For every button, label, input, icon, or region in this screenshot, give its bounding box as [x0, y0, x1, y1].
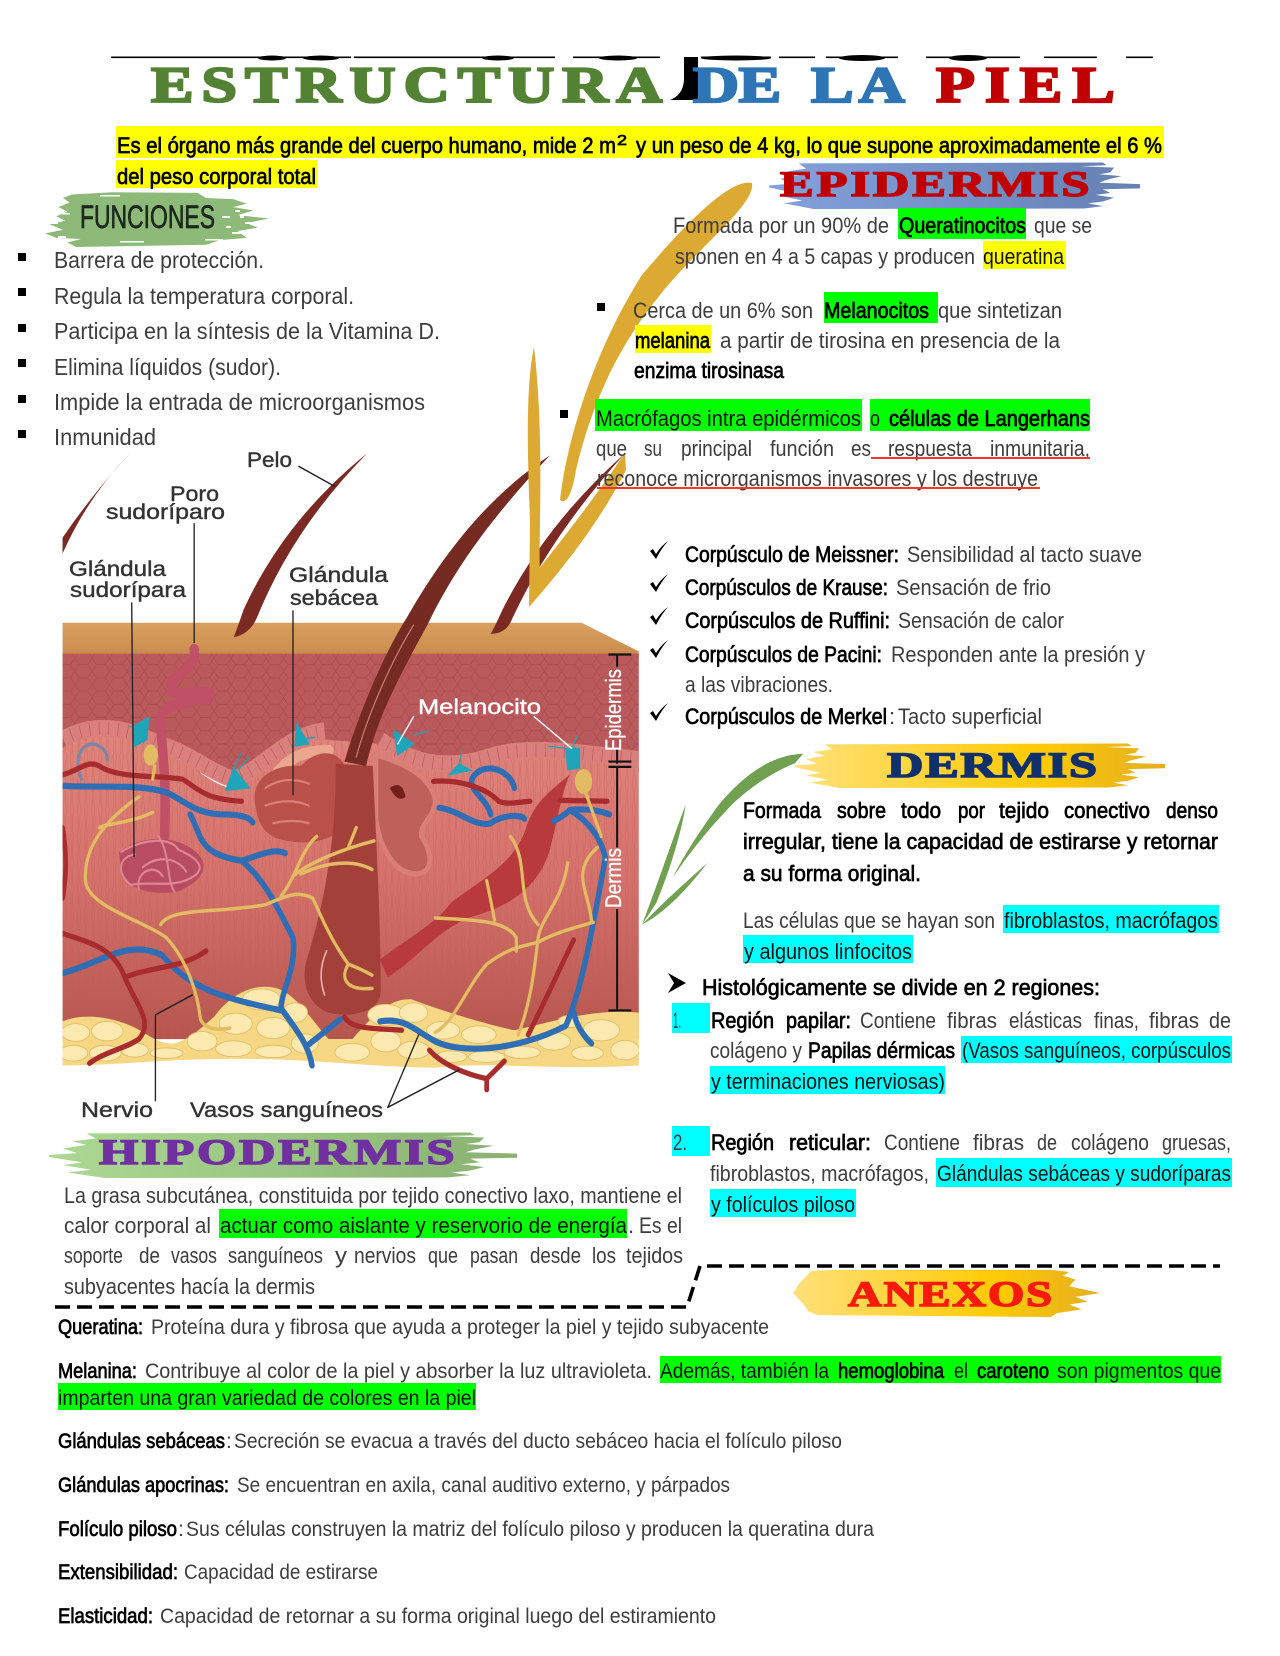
hipodermis text: actuar como aislante y reservorio de energía	[220, 1213, 628, 1238]
epidermis text: melanocitos: Cerca de un 6% son	[633, 298, 813, 323]
hipodermis heading: HIPODERMIS	[99, 1133, 455, 1172]
dermis description: sobre	[837, 798, 886, 823]
dermis heading: DERMIS	[887, 746, 1097, 785]
hipodermis text: los	[592, 1243, 616, 1268]
epidermis text: macrofagos: respuesta	[888, 436, 973, 461]
label: poro sudoriparo: sudoríparo	[106, 501, 225, 524]
hipodermis text: y	[335, 1243, 347, 1268]
anexo: melanina: hemoglobina	[838, 1360, 944, 1383]
region papilar: finas,	[1094, 1008, 1139, 1033]
pacini	[650, 640, 1145, 697]
anexo: melanina: imparten una gran variedad de colores en la piel	[58, 1387, 476, 1410]
nerve endings	[144, 744, 592, 794]
hipodermis heading	[49, 1132, 517, 1178]
region reticular: reticular:	[789, 1130, 871, 1155]
blue blood vessels	[63, 744, 609, 1066]
epidermis text: macrofagos: su	[644, 436, 662, 461]
dermis description	[743, 798, 1218, 886]
anexo: glandulas apocrinas	[58, 1474, 730, 1497]
anexo: elasticidad: Capacidad de retornar a su forma original luego del estiramiento	[160, 1605, 716, 1628]
epidermis text: macrofagos: células de Langerhans	[889, 406, 1090, 431]
anexo: melanina: Melanina:	[58, 1360, 137, 1383]
epidermis text: macrofagos	[560, 399, 1090, 491]
dermis cells: y algunos linfocitos	[744, 939, 912, 964]
dermis cells: Las células que se hayan son	[743, 908, 995, 933]
leader lines	[132, 466, 459, 1107]
hipodermis text: nervios	[354, 1243, 416, 1268]
label: glandula sudoripara: sudorípara	[70, 579, 186, 602]
title word LA: LA	[811, 58, 905, 113]
funciones heading	[45, 192, 269, 247]
epidermis text: queratinocitos: sponen en 4 a 5 capas y producen	[675, 244, 975, 269]
hipodermis text: Es el	[639, 1213, 682, 1238]
hipodermis text: La grasa subcutánea, constituida por tejido conectivo laxo, mantiene el	[64, 1183, 682, 1208]
label: nervio: Nervio	[81, 1099, 153, 1122]
region reticular: de	[1037, 1130, 1057, 1155]
anexo: melanina: Además, también la	[660, 1360, 829, 1383]
fat layer	[63, 987, 639, 1068]
label: epidermis: Epidermis	[601, 669, 626, 751]
epidermis text: melanocitos: enzima tirosinasa	[634, 358, 785, 383]
hipodermis text: tejidos	[626, 1243, 683, 1268]
ruffini	[650, 607, 1064, 633]
hipodermis text: subyacentes hacía la dermis	[64, 1274, 315, 1299]
region reticular: 2.	[673, 1130, 687, 1155]
region papilar: de	[1209, 1008, 1231, 1033]
region reticular: fibroblastos, macrófagos,	[710, 1161, 929, 1186]
epidermis text: melanocitos: que sintetizan	[938, 298, 1062, 323]
region reticular: gruesas,	[1162, 1130, 1231, 1155]
anexo: foliculo piloso: Folículo piloso	[58, 1518, 177, 1541]
epidermis text: macrofagos: que	[596, 436, 627, 461]
anexo: queratina: Proteína dura y fibrosa que ayuda a proteger la piel y tejido subyacente	[151, 1316, 769, 1339]
title word DE: DE	[693, 58, 781, 113]
hipodermis text: .	[628, 1213, 634, 1238]
region reticular: y folículos piloso	[711, 1192, 855, 1217]
scale bars	[608, 655, 631, 1010]
region papilar: Papilas dérmicas	[808, 1038, 955, 1063]
region papilar: papilar:	[786, 1008, 851, 1033]
merkel: Corpúsculos de Merkel	[685, 704, 887, 729]
ruffini: Sensación de calor	[898, 608, 1064, 633]
region papilar	[672, 1003, 1232, 1094]
intro highlighted text: y un peso de 4 kg, lo que supone aproximadamente el 6 %	[636, 133, 1162, 158]
dermis description: todo	[901, 798, 941, 823]
fat cells	[59, 989, 639, 1062]
region reticular: Región	[711, 1130, 774, 1155]
dermis cells	[743, 905, 1219, 964]
dermis description: Formada	[743, 798, 822, 823]
title	[111, 55, 1153, 113]
dermis cells: fibroblastos, macrófagos	[1004, 908, 1218, 933]
merkel: :	[889, 704, 895, 729]
dermis description: conectivo	[1064, 798, 1150, 823]
epidermis text: macrofagos: función	[770, 436, 834, 461]
region papilar: fibras	[1149, 1008, 1199, 1033]
melanocito leaders	[398, 717, 572, 748]
label: poro sudoriparo: Poro	[170, 483, 219, 506]
region papilar: Contiene	[860, 1008, 936, 1033]
hipodermis text: de	[139, 1243, 160, 1268]
anexo: foliculo piloso: Sus células construyen la matriz del folículo piloso y producen la queratina dura	[186, 1518, 874, 1541]
skin cross-section illustration	[59, 449, 639, 1122]
hipodermis text: que	[428, 1243, 458, 1268]
hipodermis text: soporte	[64, 1243, 123, 1268]
epidermis text: queratinocitos: que se	[1034, 213, 1092, 238]
intro highlighted text: 2	[617, 132, 627, 149]
epidermis text: melanocitos: Melanocitos	[824, 298, 929, 323]
sweat duct	[160, 649, 210, 836]
label: glandula sudoripara	[69, 558, 186, 602]
melanocytes	[129, 718, 580, 790]
meissner	[650, 541, 1142, 567]
anexo: elasticidad: Elasticidad:	[58, 1605, 153, 1628]
epidermis heading: EPIDERMIS	[780, 165, 1089, 204]
pacini: Corpúsculos de Pacini:	[685, 642, 882, 667]
pacini: Responden ante la presión y	[891, 642, 1145, 667]
sebaceous gland right	[376, 755, 435, 874]
label: glandula sebacea: sebácea	[290, 587, 378, 610]
krause: Corpúsculos de Krause:	[685, 575, 888, 600]
intro highlighted text: Es el órgano más grande del cuerpo humano, mide 2 m	[117, 133, 616, 158]
hipodermis text: calor corporal al	[64, 1213, 211, 1238]
intro highlighted text: del peso corporal total	[117, 164, 316, 189]
pacini: a las vibraciones.	[685, 672, 833, 697]
dermis description: irregular, tiene la capacidad de estirarse y retornar	[743, 829, 1218, 854]
skin surface	[63, 623, 639, 658]
anexo: melanina: el	[954, 1360, 968, 1383]
anexo: extensibilidad	[58, 1561, 378, 1584]
epidermis text: melanocitos	[597, 292, 1062, 383]
anexo: glandulas sebaceas: Glándulas sebáceas	[58, 1430, 225, 1453]
dermis description: tejido	[999, 798, 1049, 823]
krause	[650, 574, 1051, 600]
region reticular: Glándulas sebáceas y sudoríparas	[937, 1161, 1231, 1186]
anexo: queratina: Queratina:	[58, 1316, 143, 1339]
region reticular: fibras	[973, 1130, 1024, 1155]
label: dermis: Dermis	[601, 848, 626, 908]
arrector muscle	[380, 775, 570, 977]
yellow nerves	[85, 766, 601, 1035]
dermis heading	[795, 743, 1165, 788]
anexo: foliculo piloso: :	[178, 1518, 184, 1541]
arrow: gold brush from epidermis heading	[528, 183, 752, 607]
anexo: melanina: Contribuye al color de la piel y absorber la luz ultravioleta.	[145, 1360, 652, 1383]
epidermis text: macrofagos: reconoce microrganismos invasores y los destruye	[597, 466, 1038, 491]
title rule with cropped ink	[111, 55, 1153, 100]
hipodermis text	[64, 1183, 683, 1299]
region reticular: colágeno	[1071, 1130, 1149, 1155]
histological regions heading: Histológicamente se divide en 2 regiones:	[702, 975, 1100, 1000]
epidermis text: queratinocitos: queratina	[983, 244, 1065, 269]
epidermis layer	[63, 654, 639, 773]
epidermis text: macrofagos: Macrófagos intra epidérmicos	[596, 406, 861, 431]
funciones list	[18, 247, 440, 450]
epidermis text: queratinocitos	[673, 208, 1092, 269]
item 4: Elimina líquidos (sudor).	[54, 354, 281, 380]
hairs above skin	[63, 453, 625, 637]
meissner: Sensibilidad al tacto suave	[907, 542, 1142, 567]
hipodermis text: vasos	[171, 1243, 217, 1268]
epidermis text: macrofagos: principal	[681, 436, 752, 461]
hipodermis text: desde	[530, 1243, 581, 1268]
region papilar: (Vasos sanguíneos, corpúsculos	[962, 1038, 1231, 1063]
sweat gland coil	[119, 839, 204, 893]
ruffini: Corpúsculos de Ruffini:	[685, 608, 890, 633]
anexo: glandulas sebaceas: Secreción se evacua a través del ducto sebáceo hacia el folículo piloso	[234, 1430, 842, 1453]
intro highlighted text	[116, 126, 1164, 189]
meissner: Corpúsculo de Meissner:	[685, 542, 899, 567]
title word ESTRUCTURA: ESTRUCTURA	[151, 58, 663, 113]
anexos heading: ANEXOS	[848, 1275, 1052, 1315]
label: vasos sanguineos: Vasos sanguíneos	[190, 1099, 383, 1122]
region papilar: fibras	[947, 1008, 997, 1033]
epidermis text: queratinocitos: Formada por un 90% de	[673, 213, 889, 238]
hair follicle	[305, 764, 381, 1015]
item 2: Regula la temperatura corporal.	[54, 283, 354, 309]
region papilar: y terminaciones nerviosas)	[711, 1069, 945, 1094]
region reticular	[672, 1126, 1232, 1217]
funciones heading: FUNCIONES	[80, 199, 215, 235]
anexo: melanina: caroteno	[977, 1360, 1049, 1383]
item 1: Barrera de protección.	[54, 247, 264, 273]
epidermis text: macrofagos: o	[870, 406, 880, 431]
label: glandula sebacea: Glándula	[289, 564, 388, 587]
sebaceous gland left	[255, 753, 352, 842]
central hair	[344, 455, 550, 766]
label: poro sudoriparo	[106, 483, 225, 524]
epidermis text: melanocitos: a partir de tirosina en presencia de la	[720, 328, 1061, 353]
anexo: melanina	[58, 1356, 1221, 1410]
region papilar: elásticas	[1009, 1008, 1082, 1033]
hipodermis text: pasan	[470, 1243, 518, 1268]
label: glandula sebacea	[289, 564, 388, 610]
anexo: glandulas apocrinas: Se encuentran en axila, canal auditivo externo, y párpados	[237, 1474, 730, 1497]
red blood vessels	[63, 764, 607, 1090]
label: pelo: Pelo	[247, 449, 292, 472]
epidermis text: macrofagos: es	[851, 436, 871, 461]
dermis description: a su forma original.	[743, 861, 921, 886]
epidermis text: queratinocitos: Queratinocitos	[899, 213, 1026, 238]
label: glandula sudoripara: Glándula	[69, 558, 166, 581]
region reticular: Contiene	[884, 1130, 960, 1155]
label: melanocito: Melanocito	[418, 696, 541, 719]
dermis description: por	[958, 798, 985, 823]
title word PIEL: PIEL	[936, 58, 1115, 113]
anexo: melanina: son pigmentos que	[1057, 1360, 1221, 1383]
dermis description: denso	[1166, 798, 1218, 823]
region papilar: 1.	[673, 1008, 681, 1033]
krause: Sensación de frio	[896, 575, 1051, 600]
corpuscles checklist	[650, 541, 1145, 729]
anexos heading	[793, 1270, 1100, 1317]
region papilar: Región	[711, 1008, 774, 1033]
anexo: extensibilidad: Extensibilidad:	[58, 1561, 178, 1584]
merkel	[650, 703, 1042, 729]
anexo: glandulas apocrinas: Glándulas apocrinas:	[58, 1474, 229, 1497]
anexo: extensibilidad: Capacidad de estirarse	[184, 1561, 378, 1584]
basal layer	[63, 728, 639, 779]
hipodermis text: sanguíneos	[228, 1243, 323, 1268]
merkel: Tacto superficial	[898, 704, 1042, 729]
arrow: green brush from dermis heading	[642, 754, 803, 925]
dashed divider	[55, 1266, 1220, 1307]
item 5: Impide la entrada de microorganismos	[54, 389, 425, 415]
epidermis text: macrofagos: inmunitaria,	[990, 436, 1090, 461]
anexo: glandulas sebaceas: :	[226, 1430, 232, 1453]
item 3: Participa en la síntesis de la Vitamina D.	[54, 318, 440, 344]
region papilar: colágeno y	[710, 1038, 802, 1063]
item 6: Inmunidad	[54, 424, 156, 450]
epidermis text: melanocitos: melanina	[635, 328, 711, 353]
dermis layer	[63, 733, 639, 1039]
